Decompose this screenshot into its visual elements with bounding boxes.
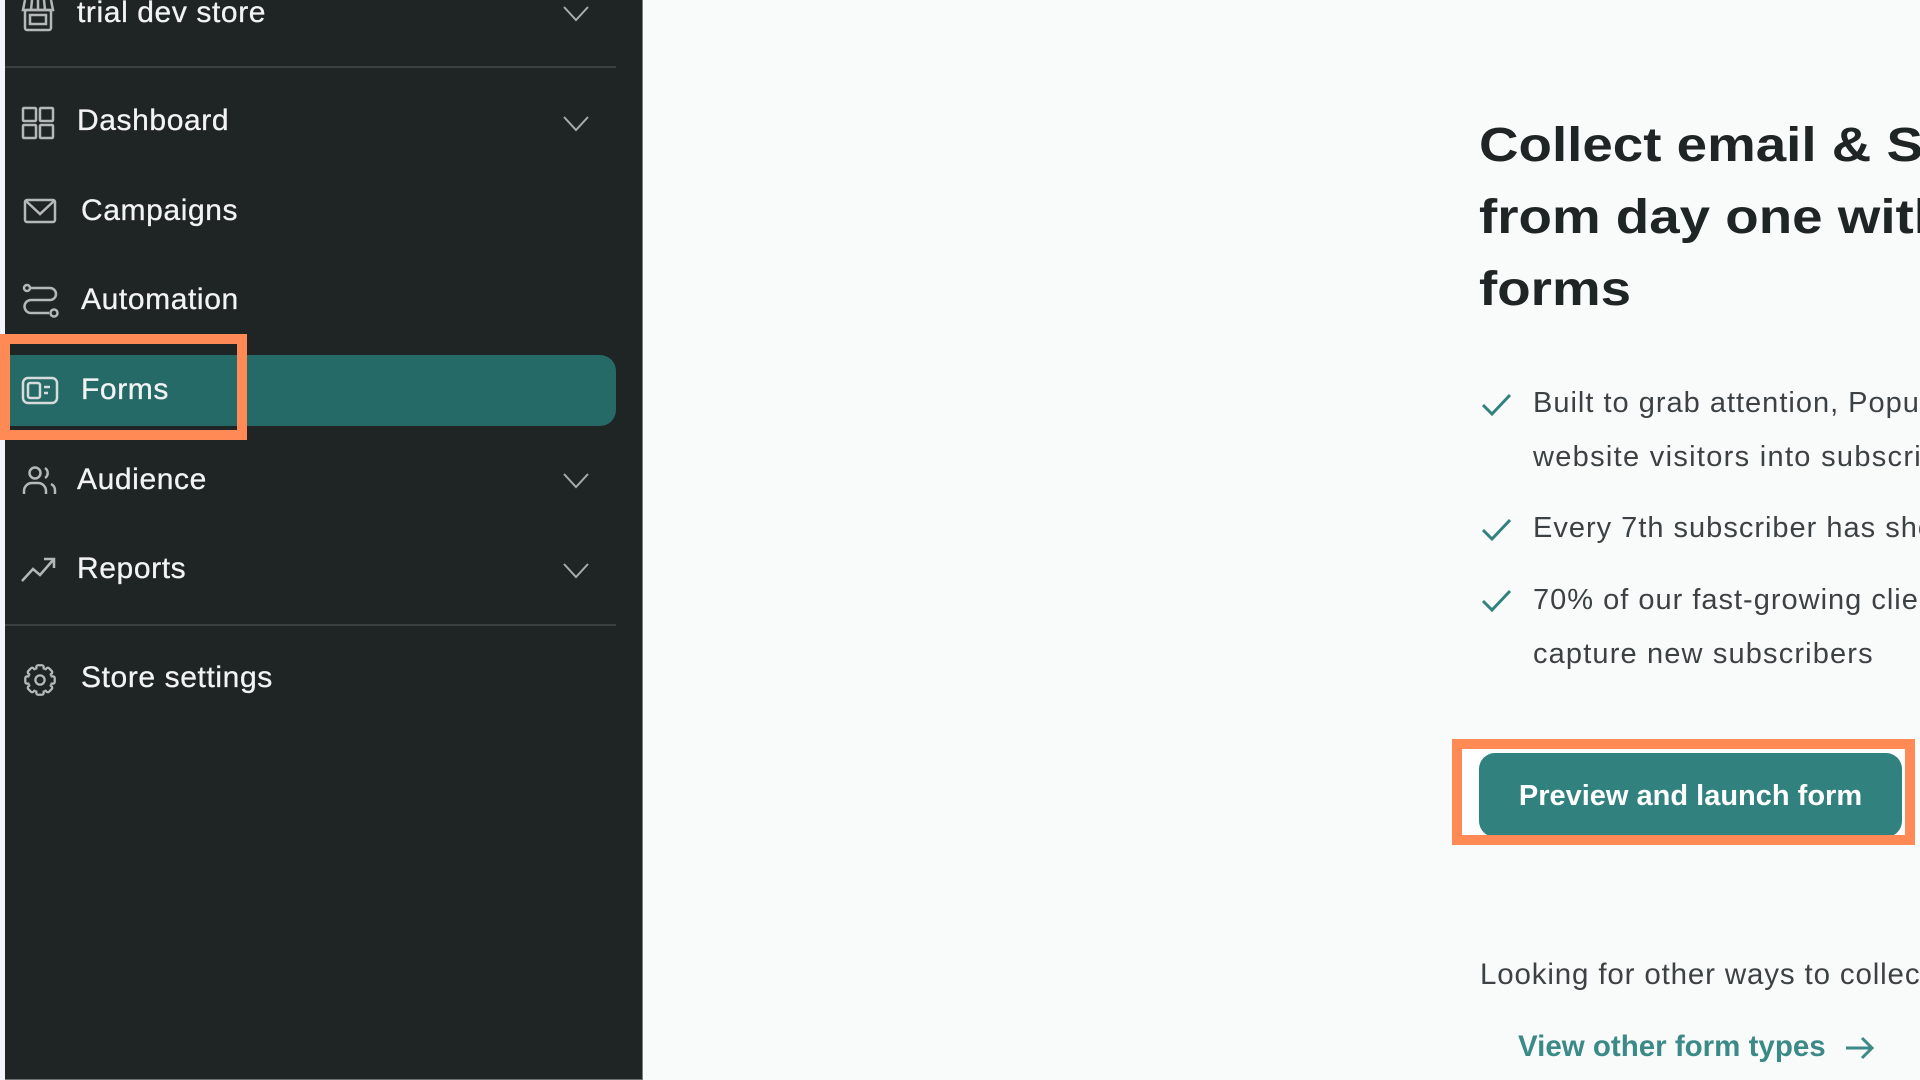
highlight box: Forms — [0, 334, 247, 440]
check icon 3 — [1482, 590, 1511, 612]
icon: store — [22, 0, 54, 32]
nav item: Store settings: Store settings — [81, 661, 273, 694]
nav item: Reports: Reports — [77, 552, 186, 585]
icon: arrow — [1846, 1037, 1874, 1059]
bullet list — [1482, 387, 1920, 670]
check icon 1 — [1482, 394, 1511, 416]
bullet list: capture new subscribers — [1533, 638, 1874, 670]
button: Preview and launch form: Preview and launch form — [1519, 780, 1862, 812]
panel: sidebar navigation — [5, 0, 643, 1080]
nav item: Reports — [21, 552, 589, 585]
icon: dashboard grid — [22, 106, 54, 140]
icon: gear — [24, 664, 56, 696]
nav item: Audience: Audience — [77, 463, 207, 496]
nav item: Automation: Automation — [81, 283, 239, 316]
nav item: Automation — [22, 283, 239, 318]
icon: automation path — [22, 284, 59, 318]
icon: people — [22, 466, 56, 494]
text: other ways: Looking for other ways to collect — [1480, 958, 1920, 991]
nav item: trial dev store — [22, 0, 589, 32]
check icon 2 — [1482, 519, 1511, 542]
icon: envelope — [24, 198, 56, 224]
heading — [1479, 119, 1920, 316]
text: Forms — [81, 373, 169, 406]
nav item: Audience — [22, 463, 589, 496]
nav item: Campaigns: Campaigns — [81, 194, 238, 227]
highlight box with button — [1452, 739, 1915, 845]
button: Preview and launch form — [1479, 753, 1902, 837]
nav item: Dashboard — [22, 104, 589, 140]
link: view other form types: View other form types — [1518, 1030, 1826, 1063]
nav item: Dashboard: Dashboard — [77, 104, 229, 137]
icon: trending chart — [21, 558, 56, 582]
heading: forms — [1479, 263, 1631, 316]
icon: form card — [22, 376, 58, 404]
nav item: Forms (active) — [5, 355, 616, 426]
